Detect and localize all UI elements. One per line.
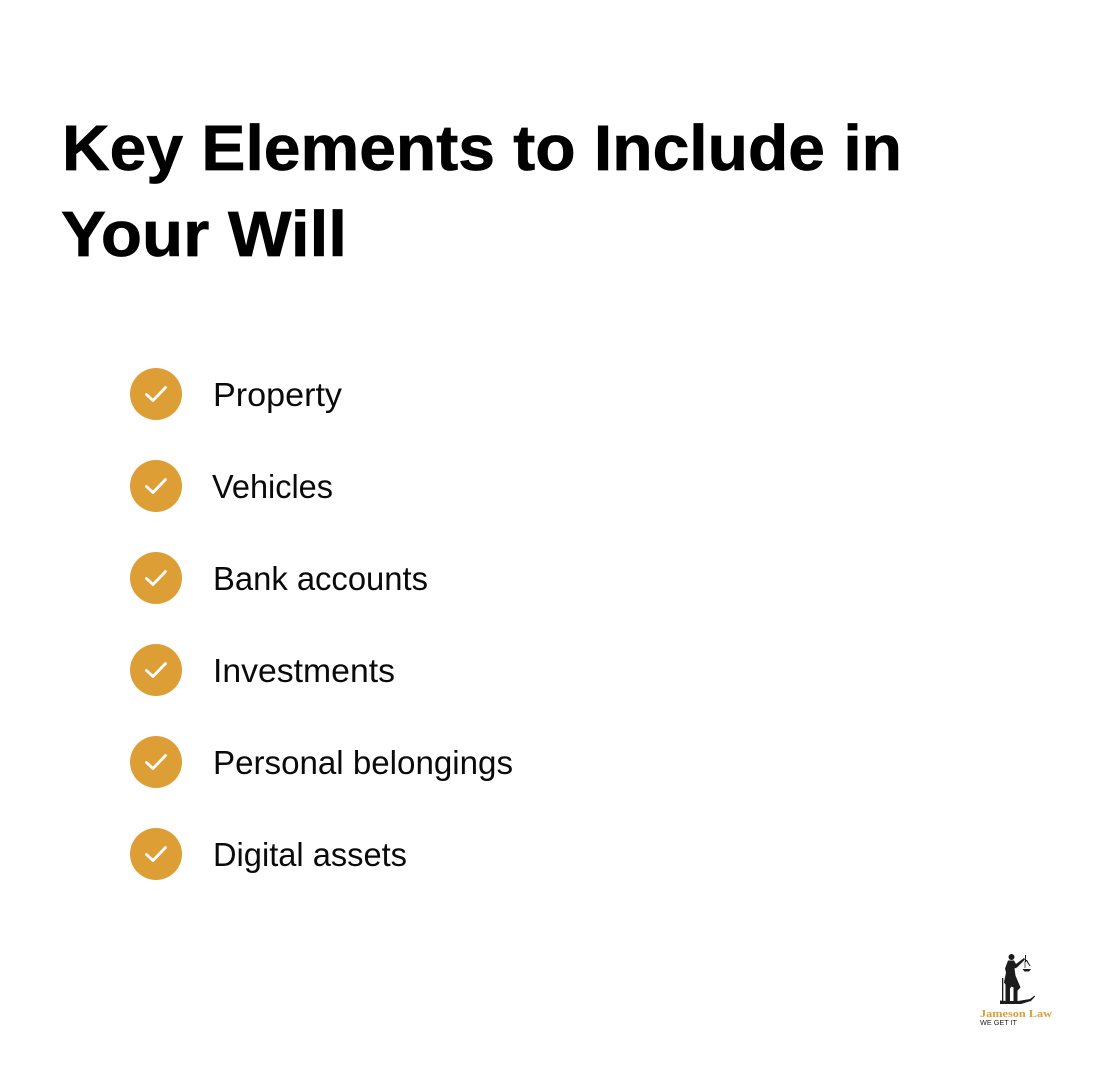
- item: Bank accounts: Bank accounts: [213, 560, 428, 597]
- brand name: Jameson Law: [980, 1008, 1052, 1020]
- item: Vehicles: Vehicles: [212, 468, 333, 505]
- item: Investments: Investments: [213, 652, 395, 689]
- item: Investments: [130, 644, 395, 696]
- item: Property: [130, 368, 343, 420]
- icon: lady justice: [1000, 954, 1035, 1004]
- item: Vehicles: [130, 460, 333, 512]
- item: Digital assets: [130, 828, 407, 880]
- item: Personal belongings: Personal belongings: [213, 744, 513, 781]
- title: Key Elements to Include in: [62, 112, 902, 184]
- item: Bank accounts: [130, 552, 428, 604]
- item: Property: Property: [213, 376, 343, 413]
- tagline: WE GET IT: [980, 1020, 1018, 1027]
- logo: Jameson Law: [980, 954, 1052, 1027]
- title: [61, 112, 902, 270]
- checklist: [130, 368, 513, 880]
- item: Digital assets: Digital assets: [213, 836, 407, 873]
- item: Personal belongings: [130, 736, 513, 788]
- title: Your Will: [61, 198, 347, 270]
